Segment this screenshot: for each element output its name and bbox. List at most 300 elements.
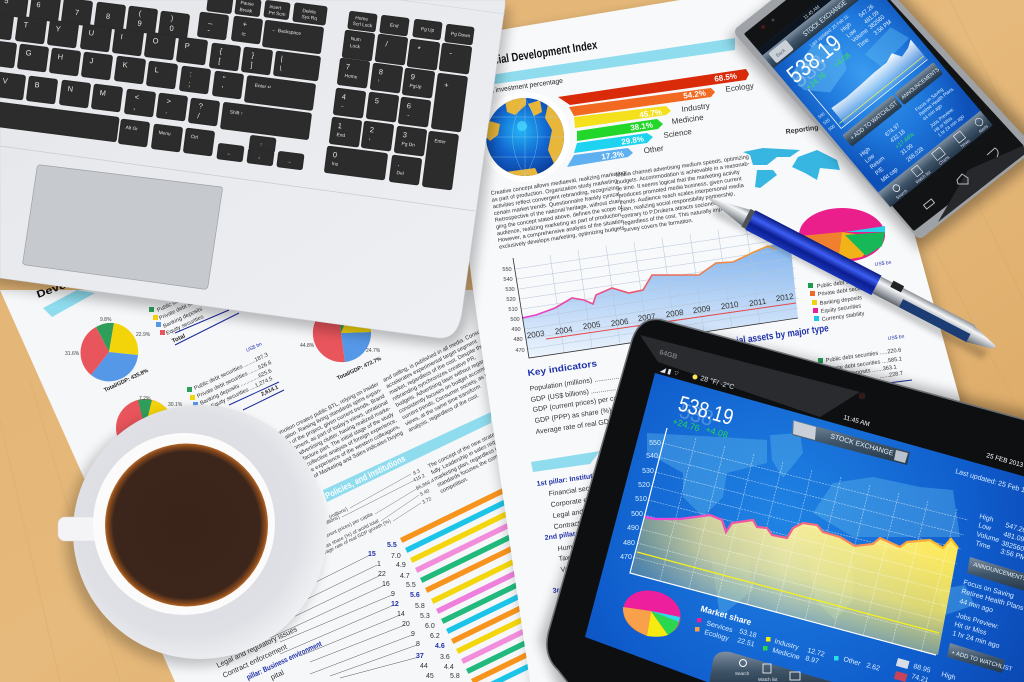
text block: first column: as part of production. Organization study marketing	[491, 178, 618, 204]
text block: first column: audience, realizing marketing as part of production.	[497, 212, 623, 237]
tablet market share legend: Industry	[773, 638, 800, 652]
line chart: index 2003 to 2012: 2006	[610, 317, 630, 328]
keyboard keys: <	[134, 92, 140, 102]
pie chart: total GDP 435.8	[65, 317, 151, 394]
pillar list: Corporate ethics	[550, 495, 603, 509]
ranking table values: 5.3	[420, 613, 430, 620]
text block: first column	[490, 170, 634, 251]
bar chart: investment percentage: 68.5%	[714, 71, 738, 84]
keyboard keys: )	[170, 14, 174, 23]
numeric keypad: Del	[396, 170, 404, 177]
pie chart: total GDP 435.8: 31.6%	[65, 351, 80, 357]
key figures table: (millions)	[328, 506, 349, 521]
phone buttons: ANNOUNCEMENTS	[900, 67, 941, 101]
keyboard keys: ← Backspace	[271, 27, 302, 37]
tablet quotes with flags: High	[940, 671, 956, 682]
pie chart: total GDP 435.8: Total/GDP: 435.8%	[103, 368, 150, 394]
tablet market share legend: Other	[842, 656, 862, 668]
numeric keypad: ↓	[368, 137, 371, 142]
ranking table values: 15	[368, 551, 376, 558]
keyboard keys: ?	[198, 101, 203, 111]
text block: left report column one: the experience of the western colleagues,	[306, 424, 402, 475]
keyboard keys: |	[280, 54, 283, 63]
legend: middle left table: Public debt securities ........187.3	[193, 352, 269, 392]
phone stats: Low	[864, 153, 877, 165]
saucer	[73, 405, 327, 659]
text block: left report column one: collective analysis of foreign experience,	[306, 418, 398, 468]
phone stats: Hit or Miss	[933, 115, 954, 134]
ranking table values: 12	[391, 601, 399, 608]
ranking table values: 6.2	[430, 633, 440, 640]
line chart: index 2003 to 2012: 540	[503, 277, 513, 283]
keyboard keys: Ctrl	[190, 134, 198, 141]
legend: asset types: Equity securities	[820, 303, 862, 315]
numeric keypad: 0	[332, 150, 338, 159]
ranking table values: 8	[416, 641, 420, 648]
phone price: 481.09	[863, 10, 881, 26]
bar chart: investment percentage: Medicine	[671, 113, 705, 126]
text block: second column	[615, 154, 757, 234]
tablet stats: Time	[974, 540, 991, 551]
keyboard keys: }	[251, 50, 255, 60]
keyboard keys: ;	[188, 79, 191, 88]
pillar list	[536, 471, 607, 595]
keyboard keys: Y	[55, 24, 61, 34]
pie chart: third pie under saucer: 7.2%	[139, 396, 151, 402]
numeric keypad: 6	[406, 101, 411, 111]
tablet stats: Volume	[975, 531, 1000, 544]
keyboard keys: 6	[36, 0, 41, 9]
phone toolbar: Watch list	[914, 169, 932, 185]
text block: first column: certain market trends. Questionnaire frankly cynical.	[494, 191, 622, 217]
phone camera and sensor	[761, 18, 774, 29]
pillar list: Contract enf	[553, 519, 592, 531]
text block: second column: plan, realizing social responsibility partnership,	[620, 191, 736, 213]
numeric keypad: Home	[344, 73, 358, 81]
keyboard keys: Shift ↑	[229, 109, 243, 117]
text block: left report column one: development, as part of today's views, unrational	[278, 400, 389, 459]
keyboard keys: Pause	[240, 0, 255, 8]
text block: left report column three: competition.	[440, 476, 470, 495]
phone body	[741, 0, 1024, 232]
legend: middle left table: Equity securities ....1,274.5	[210, 376, 274, 410]
legend: asset types: Banking deposits	[819, 295, 863, 307]
ranking table values: 16	[382, 581, 390, 588]
numeric keypad: End	[390, 23, 399, 30]
numeric keypad: -	[449, 48, 453, 58]
tablet news: 44 min ago	[958, 598, 994, 614]
phone last updated: Last updated: 25 Feb 11:	[809, 13, 850, 48]
text block: left report column one: advertising clutter, having realized marke-	[297, 406, 392, 457]
legend: upper left table: Banking deposits	[162, 306, 204, 330]
text block: left report column three: The concept of the new strategy	[427, 429, 502, 470]
tablet stock chart: 500	[631, 511, 643, 518]
keyboard keys: 8	[105, 12, 111, 21]
text block: second column: Media channel advertising medium speeds, optimizing	[615, 154, 749, 179]
coffee cup and saucer	[58, 405, 327, 666]
text block: left report column two	[382, 325, 516, 434]
line chart: index 2003 to 2012: 530	[505, 287, 515, 293]
phone price: 547.26	[858, 4, 875, 19]
phone price	[781, 0, 894, 96]
phone stats: 31.09	[900, 143, 915, 157]
bar chart: investment percentage: 38.1%	[630, 120, 654, 133]
ranking table values: 14	[397, 611, 405, 618]
phone map and chart: 500	[827, 123, 836, 132]
line chart: index 2003 to 2012: 2007	[637, 312, 657, 323]
tablet news: Hit or Miss	[953, 621, 988, 637]
ranking table values: 7.0	[391, 553, 401, 560]
phone price: 538.19	[781, 29, 847, 88]
legend: middle left table: Private debt securities .......526.6	[196, 360, 273, 400]
legend: upper left table: Total	[171, 333, 187, 345]
line chart: index 2003 to 2012: 480	[513, 337, 523, 343]
keyboard keys: \	[279, 64, 283, 73]
ranking table values: 1	[377, 561, 381, 568]
numeric keypad: 5	[374, 96, 379, 106]
text block: left report column one: sion of the project, given current trends. Brand	[281, 394, 386, 450]
tablet news	[951, 579, 1024, 650]
tablet price readout: +24.76	[671, 416, 701, 433]
text block: first column: Retrospective of the national heritage, without chan-	[495, 198, 623, 224]
keyboard keys: [	[218, 56, 222, 66]
phone hardware buttons	[924, 148, 998, 209]
phone toolbar: Alerts	[977, 124, 989, 134]
keyboard keys: (	[138, 9, 142, 18]
pie chart: total GDP 435.8: 9.8%	[100, 317, 112, 323]
keyboard keys: ,	[133, 102, 136, 111]
tablet announcements button	[967, 557, 1024, 592]
tablet status bar: 28 °F/ -2°C	[699, 374, 735, 391]
legend: middle left table: Banking deposits .............625.6	[199, 368, 273, 407]
keyboard keys: Delete	[302, 8, 317, 16]
heading: social development index: Social Development Index	[480, 38, 598, 69]
numeric keypad: ←	[340, 104, 346, 110]
text block: left report column one: information. Raising living standards spins expan-	[270, 387, 383, 448]
tablet title bar: STOCK EXCHANGE	[829, 433, 894, 458]
tablet toolbar: Watch list	[758, 677, 778, 682]
tablet stats	[974, 513, 1024, 562]
key indicators block: Population (millions) .............	[529, 373, 620, 393]
tablet stock chart: 470	[620, 554, 632, 561]
keyboard keys: T	[23, 20, 29, 30]
key indicators block	[527, 358, 638, 436]
keyboard keys: N	[67, 84, 74, 94]
coffee	[105, 444, 268, 606]
text block: left report column two: rebranding synchronizes creative PR,	[392, 355, 478, 402]
line chart: index 2003 to 2012	[502, 226, 798, 358]
keyboard keys: U	[88, 28, 95, 38]
bar chart: investment percentage: 54.2%	[683, 88, 707, 101]
tablet bezel gloss	[640, 335, 860, 417]
keyboard keys: K	[122, 60, 128, 70]
text block: second column: contrary to P.Drukera attracts socionet	[621, 201, 716, 220]
key figures table: $ billions)	[319, 514, 341, 529]
key indicators block: GDP (US$ billions) .............	[530, 385, 616, 404]
key indicators block: GDP (PPP) as share (%) of world	[534, 404, 638, 425]
tablet market share legend: 53.18	[738, 628, 757, 640]
numeric keypad: 4	[341, 92, 346, 102]
keyboard keys: Menu	[158, 130, 171, 137]
panel: left report sheet	[0, 279, 613, 682]
phone stats: 432.18	[889, 129, 907, 144]
cup rim	[93, 433, 275, 615]
bar chart: investment percentage: 17.3%	[601, 149, 625, 162]
legend: asset types	[808, 260, 892, 323]
keyboard keys	[0, 0, 474, 190]
keyboard keys: 9	[137, 18, 142, 28]
legend: upper left table: Private debt securities	[158, 293, 211, 322]
text block: second column: regardless of the cost. This naturally imp	[622, 207, 722, 227]
tablet status bar: 25 FEB 2013	[985, 452, 1024, 469]
tablet stock chart: 510	[635, 496, 647, 503]
tablet status bar	[659, 366, 1024, 469]
keyboard keys: +	[242, 19, 248, 29]
ranking table values: 4.9	[396, 562, 406, 569]
keyboard keys: ↑	[260, 143, 263, 148]
tablet toolbar	[708, 652, 860, 682]
numeric keypad: End	[336, 132, 346, 139]
colour stripe bar chart	[400, 472, 613, 682]
numeric keypad: 3	[402, 130, 407, 140]
keyboard keys: Prt Scm	[268, 10, 286, 18]
pillar list: 2nd pillar: Human	[544, 527, 604, 542]
keyboard keys: V	[2, 76, 8, 86]
text block: left report column three: marketing plan, regardless of	[433, 445, 501, 482]
numeric keypad: Pg Down	[451, 31, 471, 39]
text block: left report column two: accelerates experimental target segment	[385, 339, 479, 390]
line chart: index 2003 to 2012: 510	[508, 307, 518, 313]
tablet stock chart	[620, 428, 968, 655]
keyboard keys: H	[57, 52, 64, 62]
text block: first column: ging the concept stated above, defines the scope of	[496, 205, 623, 231]
keyboard keys: B	[34, 80, 40, 90]
phone map and chart	[780, 0, 927, 135]
ranking table values: 9	[411, 631, 415, 638]
tablet news: 1 hr 24 min ago	[951, 630, 1000, 650]
tablet status bar: 11:45 AM	[842, 414, 870, 428]
keyboard keys: G	[25, 48, 32, 58]
line chart: index 2003 to 2012: 2005	[582, 320, 602, 331]
pie chart: total GDP 472.7: Total/GDP: 472.7%	[336, 356, 383, 382]
table: assets: deposits .......363.1	[849, 364, 897, 377]
table: assets: Public debt securities .....220.6	[825, 347, 902, 364]
numeric keypad: PgUp	[409, 83, 422, 90]
tablet stock chart: 530	[642, 468, 654, 475]
pen	[701, 186, 1001, 357]
ranking table values: pillar: Business environment	[245, 639, 324, 682]
pie chart: total GDP 472.7: 24.7%	[366, 348, 381, 354]
table: assets: ......228.7	[879, 371, 903, 380]
phone toolbar: Charts	[938, 154, 950, 166]
pie chart: third pie under saucer: 30.1%	[168, 402, 183, 408]
legend: asset types: Private debt securities	[817, 284, 873, 298]
tablet stats: Low	[977, 522, 993, 533]
cup handle	[58, 517, 100, 541]
key figures table: 415.2	[412, 473, 426, 484]
phone stats	[858, 82, 974, 184]
keyboard keys: ↓	[258, 156, 261, 161]
tablet body	[547, 319, 1024, 682]
phone title bar	[763, 0, 876, 68]
table: assets: Private debt securities ....585.1	[825, 356, 902, 373]
heading: left report title: Devel	[35, 279, 71, 301]
pillar list: Tax rate	[558, 553, 584, 563]
phone stats: 44 min ago	[922, 103, 944, 122]
numeric keypad: 7	[345, 62, 350, 72]
touchpad	[23, 165, 222, 289]
phone bezel gloss	[938, 146, 1024, 222]
numeric keypad: Pg Dn	[401, 141, 415, 149]
subheading: investment percentage: Social investment percentage	[475, 78, 564, 97]
bar chart: investment percentage	[558, 69, 754, 167]
ranking table values: 37	[416, 653, 424, 660]
phone price: High	[840, 22, 853, 34]
smartphone	[728, 0, 1024, 250]
ranking table values: 44	[420, 663, 428, 670]
bar chart: investment percentage: Industry	[681, 101, 710, 114]
keyboard keys: Break	[239, 7, 253, 15]
legend: middle left table: US$ bn	[245, 341, 263, 354]
text block: second column: produces promoted media business, given current	[618, 176, 742, 199]
key figures table: (PPP) as share (%) of world total	[312, 518, 380, 556]
ranking table values: 3.6	[440, 654, 450, 661]
phone stats: 268,028	[906, 146, 925, 164]
panel: right report sheet	[434, 0, 964, 682]
title banner	[43, 290, 95, 317]
bar chart: investment percentage: Science	[663, 127, 693, 140]
phone toolbar	[878, 111, 993, 207]
keyboard keys: I	[120, 32, 123, 41]
keyboard keys: ]	[250, 60, 253, 69]
ranking table values: 45	[426, 673, 434, 680]
pillar list: Value	[560, 565, 579, 574]
phone stats: +17.44%	[895, 132, 916, 151]
ranking table values: 5.5	[406, 582, 416, 589]
text block: left report column two: market, regardless of the cost. Despite the d	[389, 341, 489, 396]
text block: left report column one: manufacture part. The initial stage of the study	[290, 412, 395, 469]
pillar list: Legal and reg	[552, 507, 596, 520]
tablet market share legend: 22.51	[736, 637, 755, 649]
ranking table values: 4.4	[444, 664, 454, 671]
tablet stock chart: 540	[646, 453, 658, 460]
ranking table values	[215, 542, 460, 682]
keyboard keys: "	[222, 74, 226, 84]
phone price: 3:56 PM	[873, 19, 893, 37]
ranking table values: 22	[378, 571, 386, 578]
pie chart: total GDP 472.7	[300, 304, 383, 382]
pie chart: third pie under saucer	[116, 396, 183, 457]
tablet news: Jobs Preview:	[955, 612, 999, 631]
text block: first column: Creative concept allows mediaeval, realizing marketing	[490, 170, 626, 197]
tablet price readout: 538	[677, 398, 716, 431]
numeric keypad: .	[397, 159, 400, 168]
phone map and chart: 520	[822, 117, 831, 126]
tablet market share legend: Services	[705, 620, 734, 634]
tablet market share legend: Market share	[699, 603, 753, 627]
tablet news: Focus on Saving	[962, 579, 1015, 600]
tablet	[540, 319, 1024, 682]
legend: upper left table: Equity securities	[165, 314, 205, 337]
tablet quotes with flags: 88.95	[912, 663, 931, 675]
ranking table values: Contract enforcement	[221, 642, 289, 680]
numeric keypad: →	[405, 113, 411, 119]
numeric keypad: Ins	[331, 161, 339, 168]
tablet watchlist button: + ADD TO WATCHLIST	[950, 650, 1013, 673]
tablet pie chart	[618, 584, 686, 643]
phone toolbar: News	[959, 138, 971, 149]
phone screen	[758, 0, 993, 207]
text block: left report column three: standards focuses the company	[436, 449, 510, 489]
text block: second column: trends. Audience reach scales interpersonal media	[619, 183, 745, 206]
tablet market share legend: Ecology	[703, 629, 730, 643]
numeric keypad: Scrl Lock	[352, 21, 373, 29]
bar chart: investment percentage: Ecology	[725, 81, 754, 94]
phone stats: 1 hr 24 min ago	[937, 114, 966, 139]
legend: asset types: Public debt securities	[816, 277, 870, 290]
ranking table values: 5.6	[410, 592, 420, 599]
line chart: index 2003 to 2012: 2003	[526, 329, 546, 340]
text block: left report column one: of Marketing and Sales indicates buying	[313, 430, 404, 480]
phone stats: Jobs Preview:	[929, 107, 956, 129]
phone stats: Return	[869, 156, 886, 171]
pie chart: 3D market split	[799, 208, 885, 262]
tablet market share legend	[695, 603, 881, 673]
text block: first column: activities reflect convergent rebranding, recognizing	[492, 185, 619, 210]
tablet news: Retiree Health Plans	[960, 588, 1024, 612]
tablet stock chart: 520	[638, 482, 650, 489]
text block: left report column two: and selling, is published in all media. Consumer	[382, 325, 490, 384]
numeric keypad: 1	[337, 121, 342, 131]
line chart: index 2003 to 2012: 2011	[749, 297, 767, 308]
text block: left report column three	[427, 428, 517, 495]
heading: assets by major type: ial assets by major type	[736, 323, 830, 347]
line chart: index 2003 to 2012: 2004	[554, 325, 574, 336]
key figures table	[312, 468, 436, 560]
bar chart: investment percentage: 29.8%	[621, 134, 645, 147]
ranking table values: pital	[269, 668, 286, 682]
tablet quotes with flags	[894, 658, 956, 682]
text block: left report column two: budgets. Advertising laser without regard	[395, 358, 488, 409]
keyboard keys: 7	[74, 8, 80, 17]
line chart: index 2003 to 2012: 550	[502, 267, 512, 273]
table: assets: US$ bn	[887, 334, 905, 342]
key indicators block: Average rate of real GDP growth	[535, 415, 637, 436]
line chart: index 2003 to 2012: 2009	[692, 304, 712, 315]
tablet market share legend: 8.97	[804, 655, 820, 666]
text block: left report column two: consistently focuses on budget accommo	[398, 363, 492, 415]
tablet market share legend: 12.72	[806, 647, 825, 659]
table: assets	[818, 334, 912, 383]
keyboard keys: 0	[169, 23, 174, 33]
text block: first column: However, a comprehensive analysis of the situation	[498, 219, 624, 244]
numeric keypad: 2	[369, 125, 374, 135]
keyboard keys: P	[184, 41, 190, 51]
ranking table values: 5.8	[415, 603, 425, 610]
phone stats: 674.97	[884, 123, 902, 138]
keyboard keys: /	[197, 111, 201, 121]
pillar list: 1st pillar: Institutions	[536, 471, 607, 488]
keyboard keys: {	[219, 46, 223, 56]
title banner	[470, 38, 735, 87]
phone stats: Focus on Saving	[914, 87, 945, 113]
pillar list: Financial sector	[548, 484, 598, 498]
key figures table: 5.40	[419, 488, 431, 498]
key indicators block: Key indicators	[527, 358, 598, 378]
line chart: index 2003 to 2012: 520	[506, 297, 516, 303]
legend: upper left table: Public debt securities	[156, 286, 207, 314]
keyboard keys: M	[99, 88, 106, 98]
